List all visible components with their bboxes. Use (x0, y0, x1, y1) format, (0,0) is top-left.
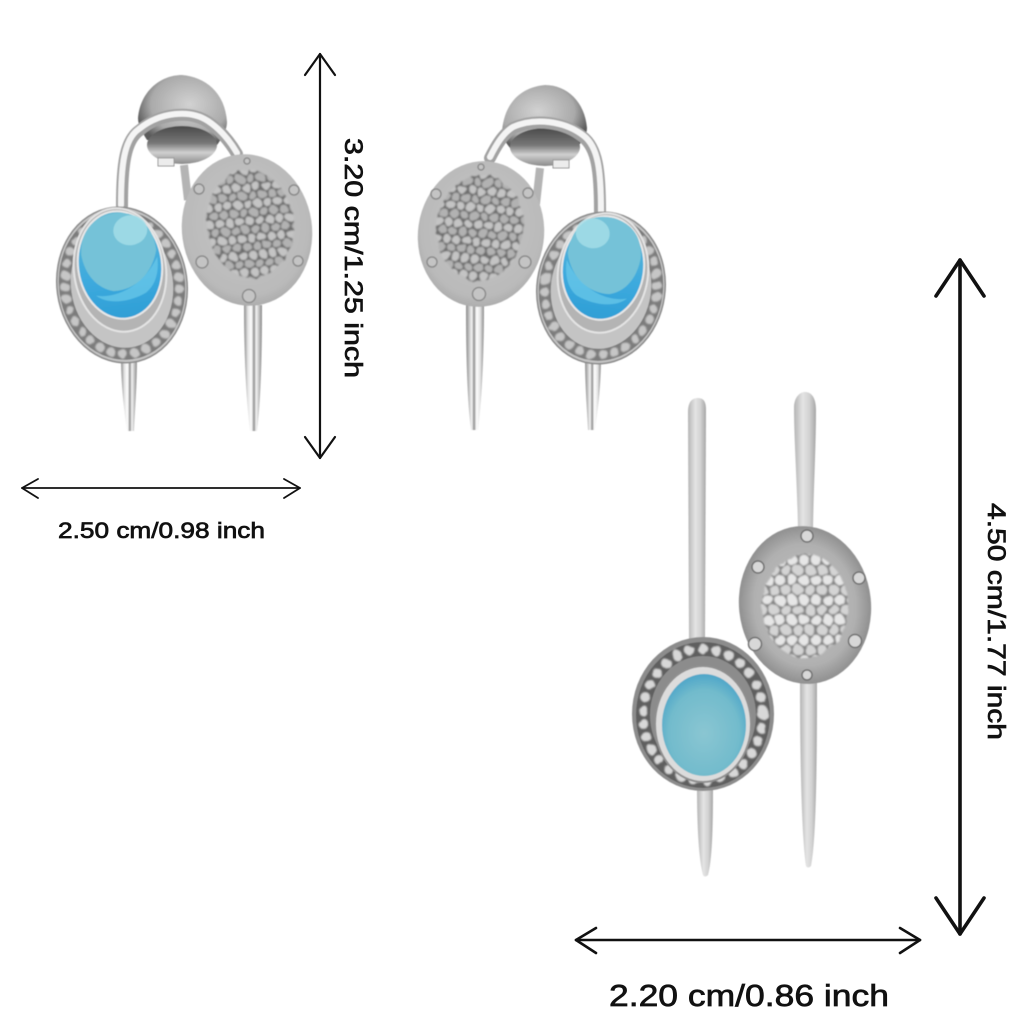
earring pair: top left (47, 75, 322, 431)
halo oval with blue gem (632, 637, 774, 791)
mirrored pave-side pin (466, 305, 484, 430)
mirrored post disc (502, 85, 587, 168)
label: bottom height: 4.50 cm/1.77 inch (982, 503, 1010, 740)
mirrored thin wire (536, 168, 540, 204)
left pin bottom (697, 785, 713, 876)
blue gem (662, 674, 746, 776)
arrow: bottom width (576, 928, 920, 953)
label: bottom width: 2.20 cm/0.86 inch (609, 978, 889, 1013)
thin wire behind oval (184, 165, 188, 200)
halo oval with blue gem (47, 199, 197, 371)
right hook pin top (794, 392, 816, 535)
earring pair: bottom right front view (632, 392, 879, 876)
pave-side pin (244, 305, 262, 431)
earring pair: top centre (mirrored) (408, 85, 675, 430)
mirrored blue gem (556, 212, 650, 324)
blue gem (72, 207, 168, 323)
pave oval panel (731, 520, 879, 690)
right pin bottom (800, 680, 817, 868)
mirrored halo oval with blue gem (527, 204, 675, 372)
arrow: top height (305, 54, 335, 458)
arrow: top width (22, 479, 300, 498)
mirrored hook wire (490, 121, 601, 212)
post disc (138, 75, 227, 166)
left hook pin top (688, 398, 706, 640)
label: top width: 2.50 cm/0.98 inch (58, 518, 265, 543)
label: top height: 3.20 cm/1.25 inch (339, 138, 367, 378)
mirrored gem-side pin (585, 355, 601, 430)
pave oval panel (172, 146, 322, 314)
hook wire (121, 114, 237, 206)
arrow: bottom height (936, 260, 984, 934)
mirrored pave oval panel (408, 153, 554, 315)
gem-side pin (121, 355, 137, 431)
